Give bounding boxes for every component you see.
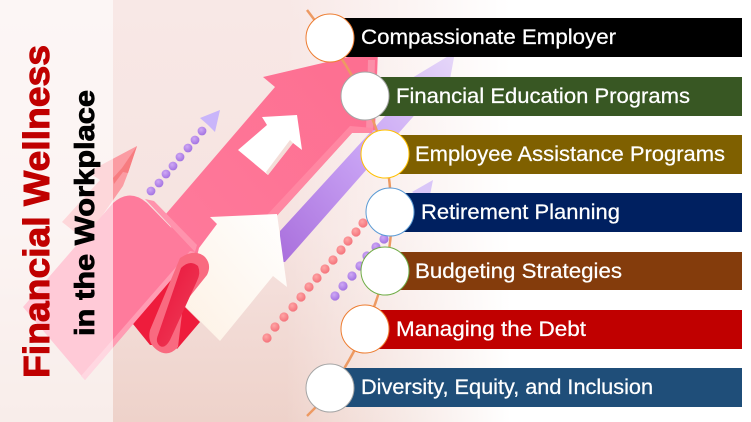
list item: Financial Education Programs: Financial Education Programs (396, 85, 690, 108)
icon: purple arrowhead (412, 180, 433, 205)
list item: Budgeting Strategies: Budgeting Strategies (415, 260, 622, 283)
heading: Financial Wellness: Financial Wellness (16, 45, 57, 378)
connector curve (307, 10, 392, 416)
heading: in the Workplace: in the Workplace (69, 90, 100, 336)
list item: Diversity, Equity, and Inclusion: Diversity, Equity, and Inclusion (361, 376, 653, 399)
list item: Retirement Planning (366, 188, 742, 236)
list item: Employee Assistance Programs (361, 130, 742, 178)
list item: Managing the Debt (341, 305, 742, 353)
list item: Employee Assistance Programs: Employee Assistance Programs (415, 143, 725, 166)
list item: Budgeting Strategies (361, 247, 742, 295)
panel: title backing (0, 0, 113, 422)
icon: purple arrow (280, 52, 455, 262)
list item: Diversity, Equity, and Inclusion (306, 364, 742, 412)
list item: Compassionate Employer: Compassionate Employer (361, 26, 616, 49)
illustration: rising arrows (23, 50, 455, 380)
list item: Compassionate Employer (306, 14, 742, 62)
chart: purple dotted line (330, 234, 389, 301)
icon: small white arrow (238, 115, 302, 175)
icon: purple dotted arrow (147, 110, 220, 195)
list item: Financial Education Programs (341, 72, 742, 120)
icon: large white arrow (185, 214, 287, 341)
icon: small pink arrow (62, 146, 137, 240)
icon: shaft underside (168, 305, 200, 349)
icon: main pink arrow (165, 50, 378, 300)
list item: Managing the Debt: Managing the Debt (396, 318, 586, 341)
list item: Retirement Planning: Retirement Planning (421, 201, 620, 224)
icon: rolled arrow tail (23, 196, 209, 380)
chart: pink dotted line (262, 218, 368, 343)
